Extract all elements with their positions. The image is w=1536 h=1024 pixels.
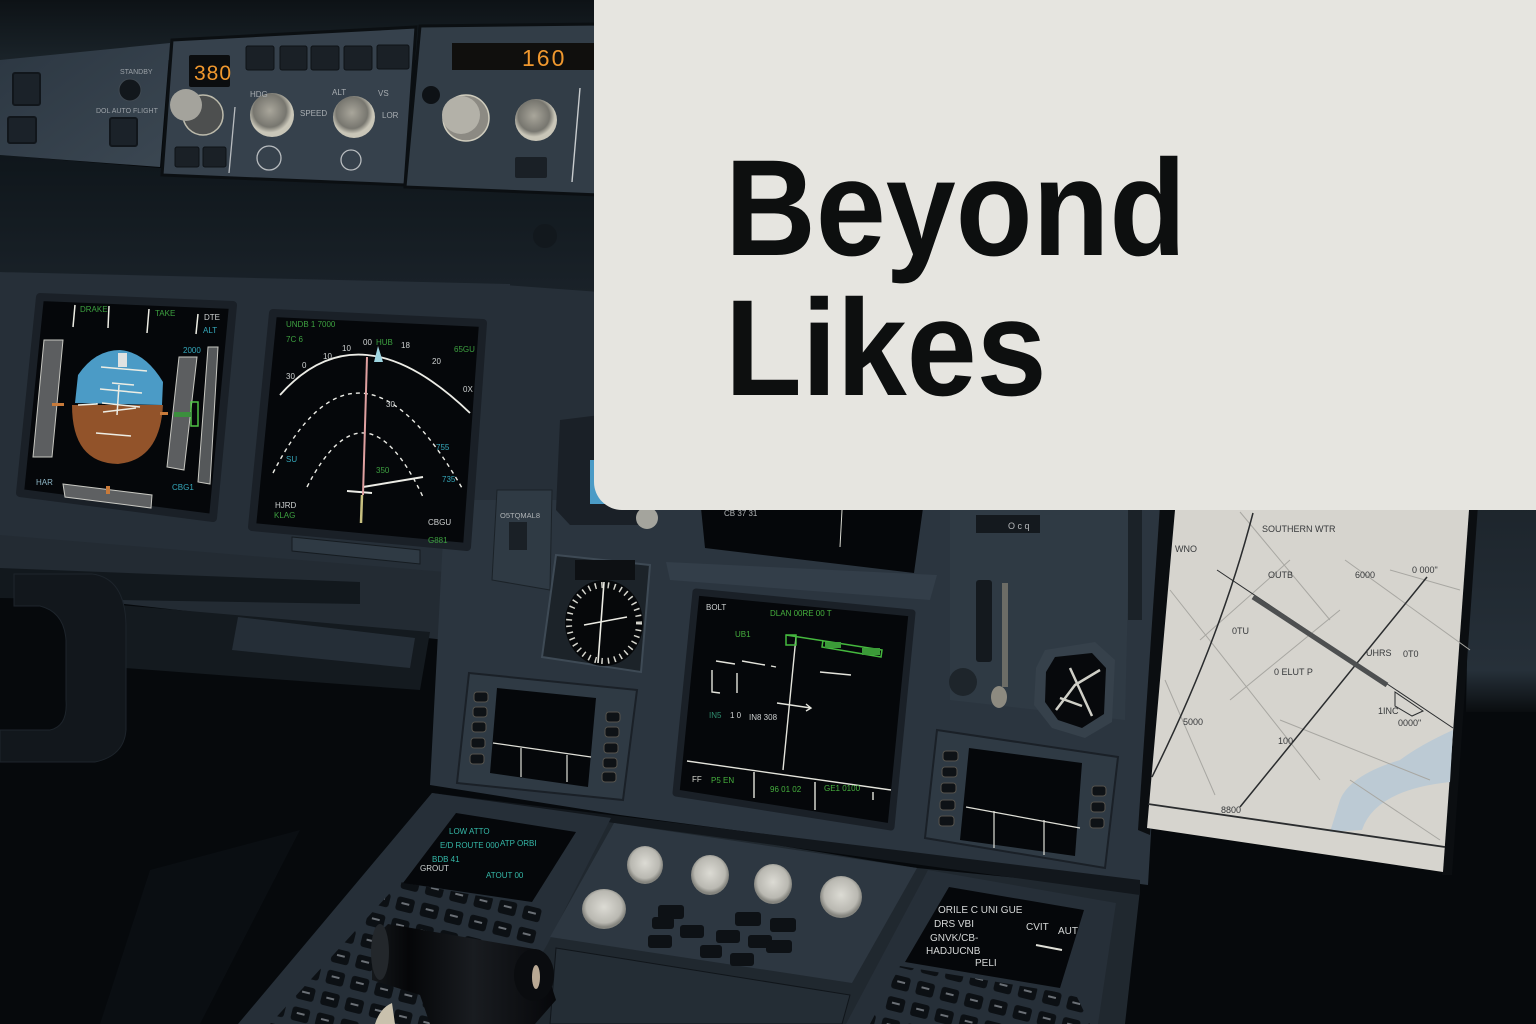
centre clock gauge [542,555,650,672]
navigation display: 755 [436,443,450,452]
navigation display: 735 [442,475,456,484]
speed readout 160 [452,43,594,71]
navigation display: 30 [386,400,395,409]
navigation display: 0X [463,385,473,394]
paper chart: UHRS [1366,648,1392,658]
right FMS keypad: AUT [1058,926,1078,937]
navigation display: SU [286,455,297,464]
paper chart [1138,505,1536,875]
primary flight display: 2000 [183,346,201,355]
left FMS keypad: LOW ATTO [449,827,490,836]
small right screen [925,730,1118,868]
title: Beyond [725,132,1186,285]
centre engine display: DLAN 00RE 00 T [770,609,832,618]
left FMS keypad [238,793,611,1024]
navigation display: 0 [302,361,307,370]
speed readout 160: 160 [522,45,566,71]
right FMS keypad: GNVK/CB- [930,933,978,944]
overhead centre panel: ALT [332,88,346,97]
side lever column and octagon gauge [949,505,1142,738]
navigation display: 20 [432,357,441,366]
centre engine display: UB1 [735,630,751,639]
navigation display: 10 [342,344,351,353]
navigation display: KLAG [274,511,295,520]
navigation display: 00 [363,338,372,347]
altitude readout 380 [189,55,232,87]
paper chart: 5000 [1183,717,1203,727]
left FMS keypad: GROUT [420,864,449,873]
centre engine display [676,592,912,827]
control yoke [0,574,126,762]
navigation display: 10 [323,352,332,361]
centre engine display: IN8 308 [749,713,778,722]
centre upper instrument stub [556,415,937,600]
centre pedestal [238,793,1140,1024]
primary flight display: DRAKE [80,305,108,314]
paper chart: SOUTHERN WTR [1262,524,1336,534]
primary flight display [20,297,233,518]
overhead left panel [0,43,170,167]
navigation display [252,313,483,547]
title [725,132,1186,425]
overhead left panel: DOL AUTO FLIGHT [96,108,159,115]
throttle lever [371,924,556,1024]
left FMS keypad: ATP ORBI [500,839,537,848]
navigation display: G881 [428,536,448,545]
centre engine display: P5 EN [711,776,734,785]
centre engine display: IN5 [709,711,722,720]
paper chart: 8800 [1221,805,1241,815]
left FMS keypad: E/D ROUTE 000 [440,841,500,850]
navigation display: HUB [376,338,393,347]
paper chart: 0TU [1232,626,1249,636]
switch plate: O5TQMAL8 [500,511,540,520]
paper chart: 0 000" [1412,565,1438,575]
paper chart: 0T0 [1403,649,1419,659]
right FMS keypad: ORILE C UNI GUE [938,905,1023,916]
paper chart: WNO [1175,544,1197,554]
overhead centre panel: VS [378,89,389,98]
navigation display: CBGU [428,518,451,527]
centre engine display: GE1 0100 [824,784,861,793]
centre instrument panel [430,500,1170,885]
lower side console [100,830,300,1024]
centre engine display: FF [692,775,702,784]
primary flight display: DTE [204,313,220,322]
side lever column and octagon gauge: O c q [1008,521,1030,531]
overhead centre panel: SPEED [300,109,327,118]
paper chart: OUTB [1268,570,1293,580]
paper chart: 0 ELUT P [1274,667,1313,677]
overhead left panel: STANDBY [120,69,153,76]
overhead centre panel: HDG [250,90,268,99]
title card panel [594,0,1536,510]
navigation display: UNDB 1 7000 [286,320,336,329]
switch plate [492,490,552,590]
paper chart: 1INC [1378,706,1399,716]
display frame panel [0,272,600,690]
centre engine display: 1 0 [730,711,742,720]
paper chart: 100 [1278,736,1293,746]
centre upper instrument stub: CB 37 31 [724,509,758,518]
small left screen [457,673,637,800]
navigation display: 18 [401,341,410,350]
primary flight display: ALT [203,326,217,335]
right FMS keypad: DRS VBI [934,919,974,930]
navigation display: 65GU [454,345,475,354]
paper chart: 0000" [1398,718,1421,728]
right FMS keypad [846,870,1116,1024]
altitude readout 380: 380 [194,62,232,85]
right FMS keypad: HADJUCNB [926,946,981,957]
title: Likes [725,272,1047,425]
left FMS keypad: ATOUT 00 [486,871,524,880]
right FMS keypad: PELI [975,958,997,969]
overhead centre panel [162,27,416,185]
overhead right panel [405,24,600,195]
centre engine display: BOLT [706,603,726,612]
navigation display: 7C 6 [286,335,303,344]
navigation display: HJRD [275,501,297,510]
right FMS keypad: CVIT [1026,922,1049,933]
paper chart: 6000 [1355,570,1375,580]
primary flight display: TAKE [155,309,175,318]
knob panel [550,823,917,983]
navigation display: 350 [376,466,390,475]
overhead centre panel: LOR [382,111,399,120]
primary flight display: CBG1 [172,483,194,492]
centre engine display: 96 01 02 [770,785,802,794]
primary flight display: HAR [36,478,53,487]
left FMS keypad: BDB 41 [432,855,460,864]
navigation display: 30 [286,372,295,381]
